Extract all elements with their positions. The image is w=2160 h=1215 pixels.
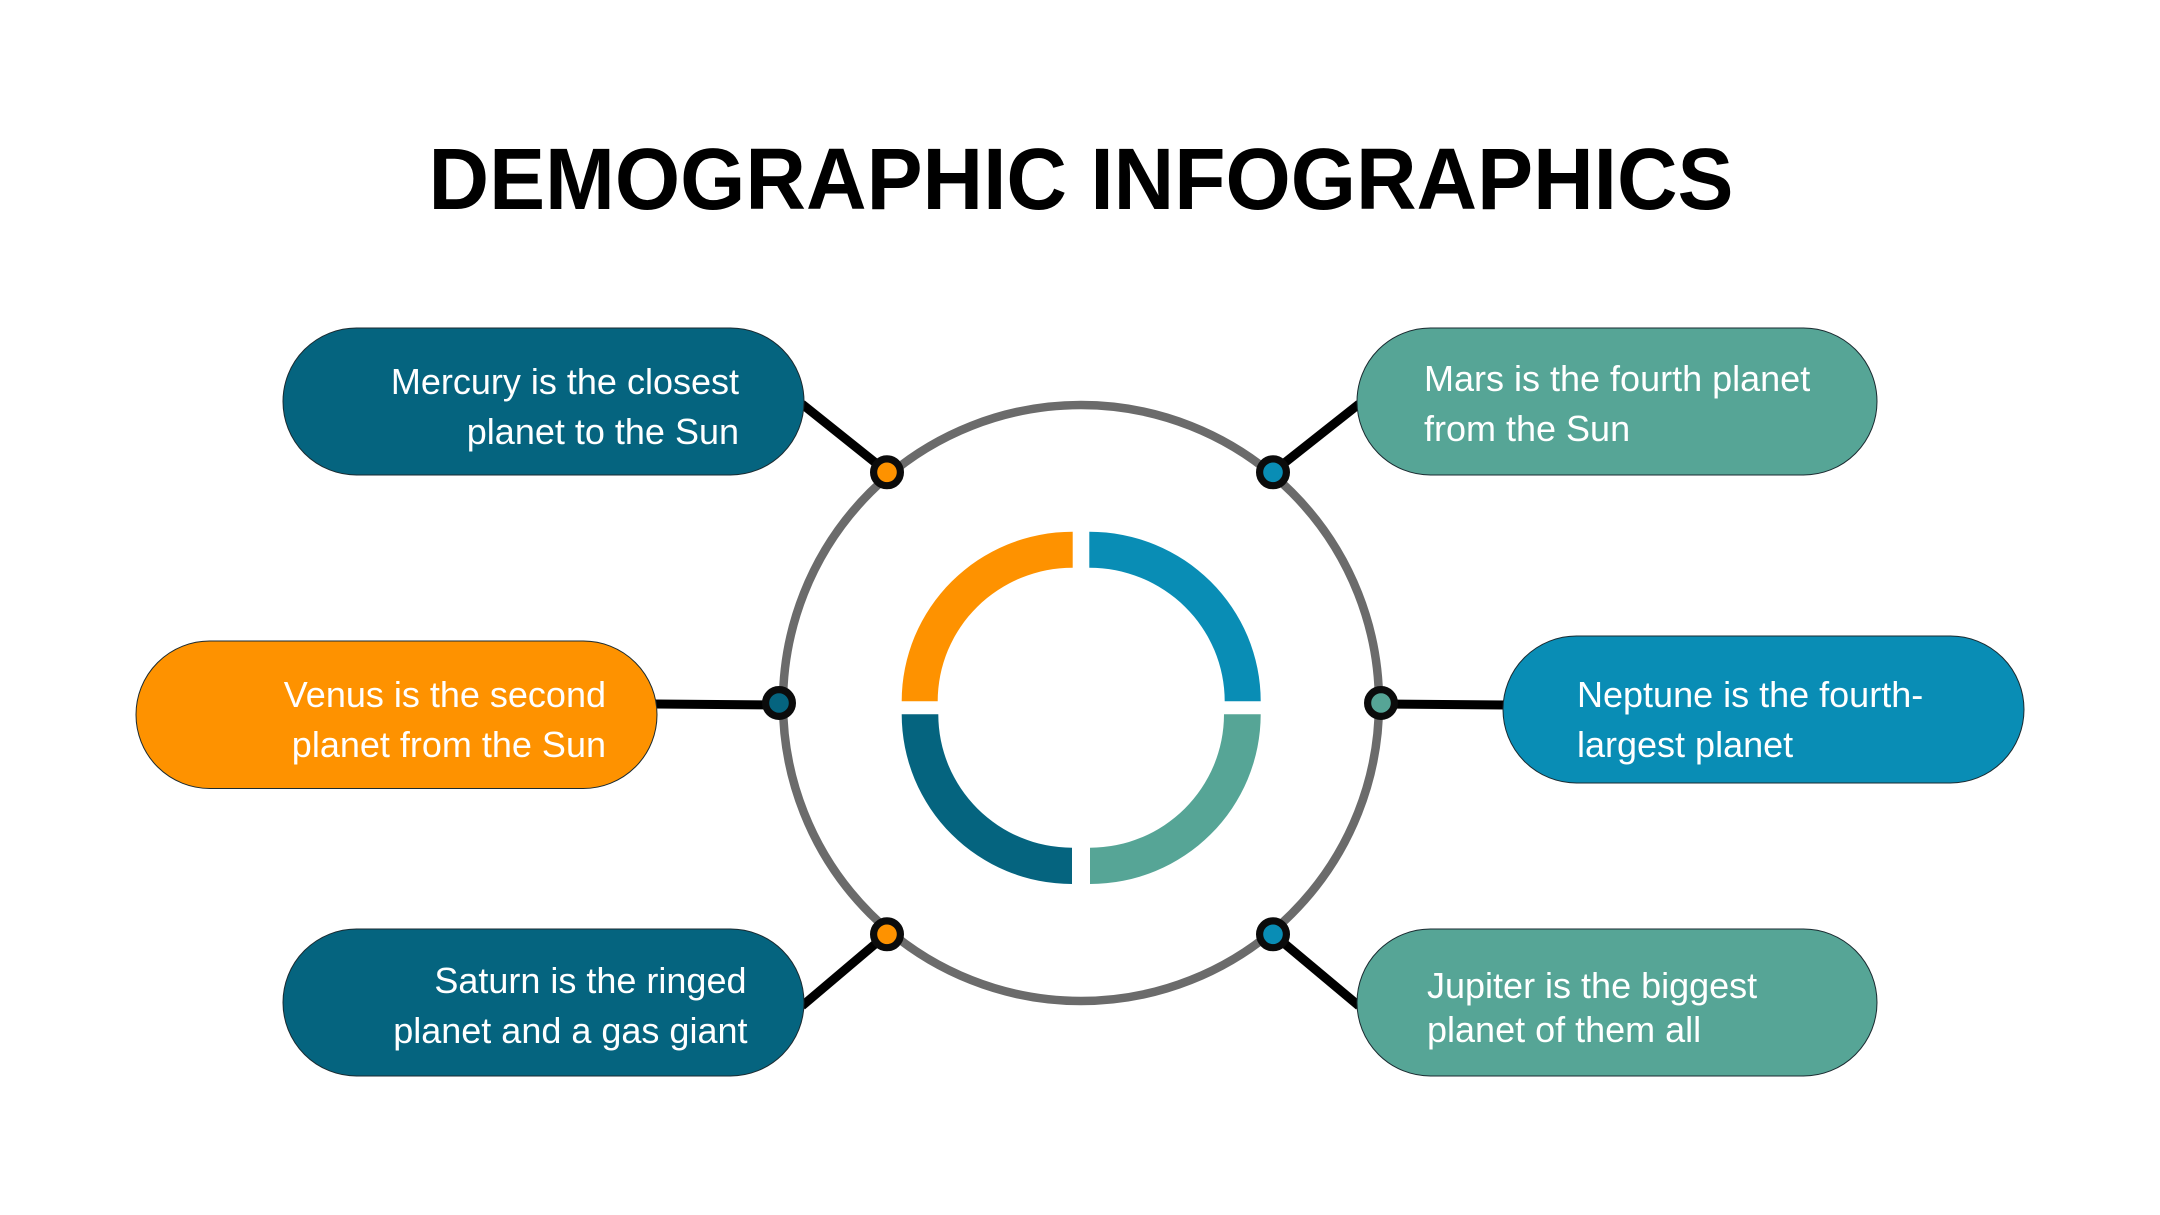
panel: Jupiter: [1357, 929, 1877, 1076]
connector: Mars: [1273, 404, 1359, 472]
node: Mars: [1260, 459, 1286, 486]
text: Venus: Venus is the second: [284, 674, 606, 715]
text: Venus: planet from the Sun: [292, 724, 606, 765]
text: Jupiter: planet of them all: [1427, 1009, 1701, 1050]
connector: Neptune: [1380, 704, 1505, 705]
central donut: [902, 532, 1261, 884]
donut segment: orange: [902, 532, 1073, 701]
node: Mercury: [874, 459, 900, 486]
node: Venus: [766, 690, 792, 716]
text: Saturn: planet and a gas giant: [393, 1010, 748, 1051]
text: Neptune: largest planet: [1577, 724, 1793, 765]
donut segment: dark blue: [902, 714, 1072, 884]
connector: Jupiter: [1273, 934, 1359, 1006]
text: Jupiter: Jupiter is the biggest: [1427, 965, 1757, 1006]
text: Mars: Mars is the fourth planet: [1424, 358, 1810, 399]
connector: Mercury: [802, 404, 887, 472]
panel: Neptune: [1503, 636, 2024, 783]
panel: Mars: [1357, 328, 1877, 475]
text: Mars: from the Sun: [1424, 408, 1630, 449]
connector: Saturn: [802, 934, 887, 1006]
panel: Venus: [136, 641, 657, 788]
node: Jupiter: [1260, 921, 1286, 948]
panel: Mercury: [283, 328, 804, 475]
panel: Saturn: [283, 929, 804, 1076]
node: Saturn: [874, 921, 900, 948]
text: Neptune: Neptune is the fourth-: [1577, 674, 1923, 715]
connector: Venus: [655, 704, 779, 705]
title: DEMOGRAPHIC INFOGRAPHICS: [428, 131, 1734, 228]
text: Mercury: planet to the Sun: [467, 411, 739, 452]
donut segment: blue: [1089, 532, 1261, 701]
node: Neptune: [1368, 690, 1394, 716]
donut segment: teal: [1090, 714, 1261, 884]
outer ring: [783, 405, 1379, 1001]
text: Mercury: Mercury is the closest: [391, 361, 739, 402]
text: Saturn: Saturn is the ringed: [434, 960, 746, 1001]
